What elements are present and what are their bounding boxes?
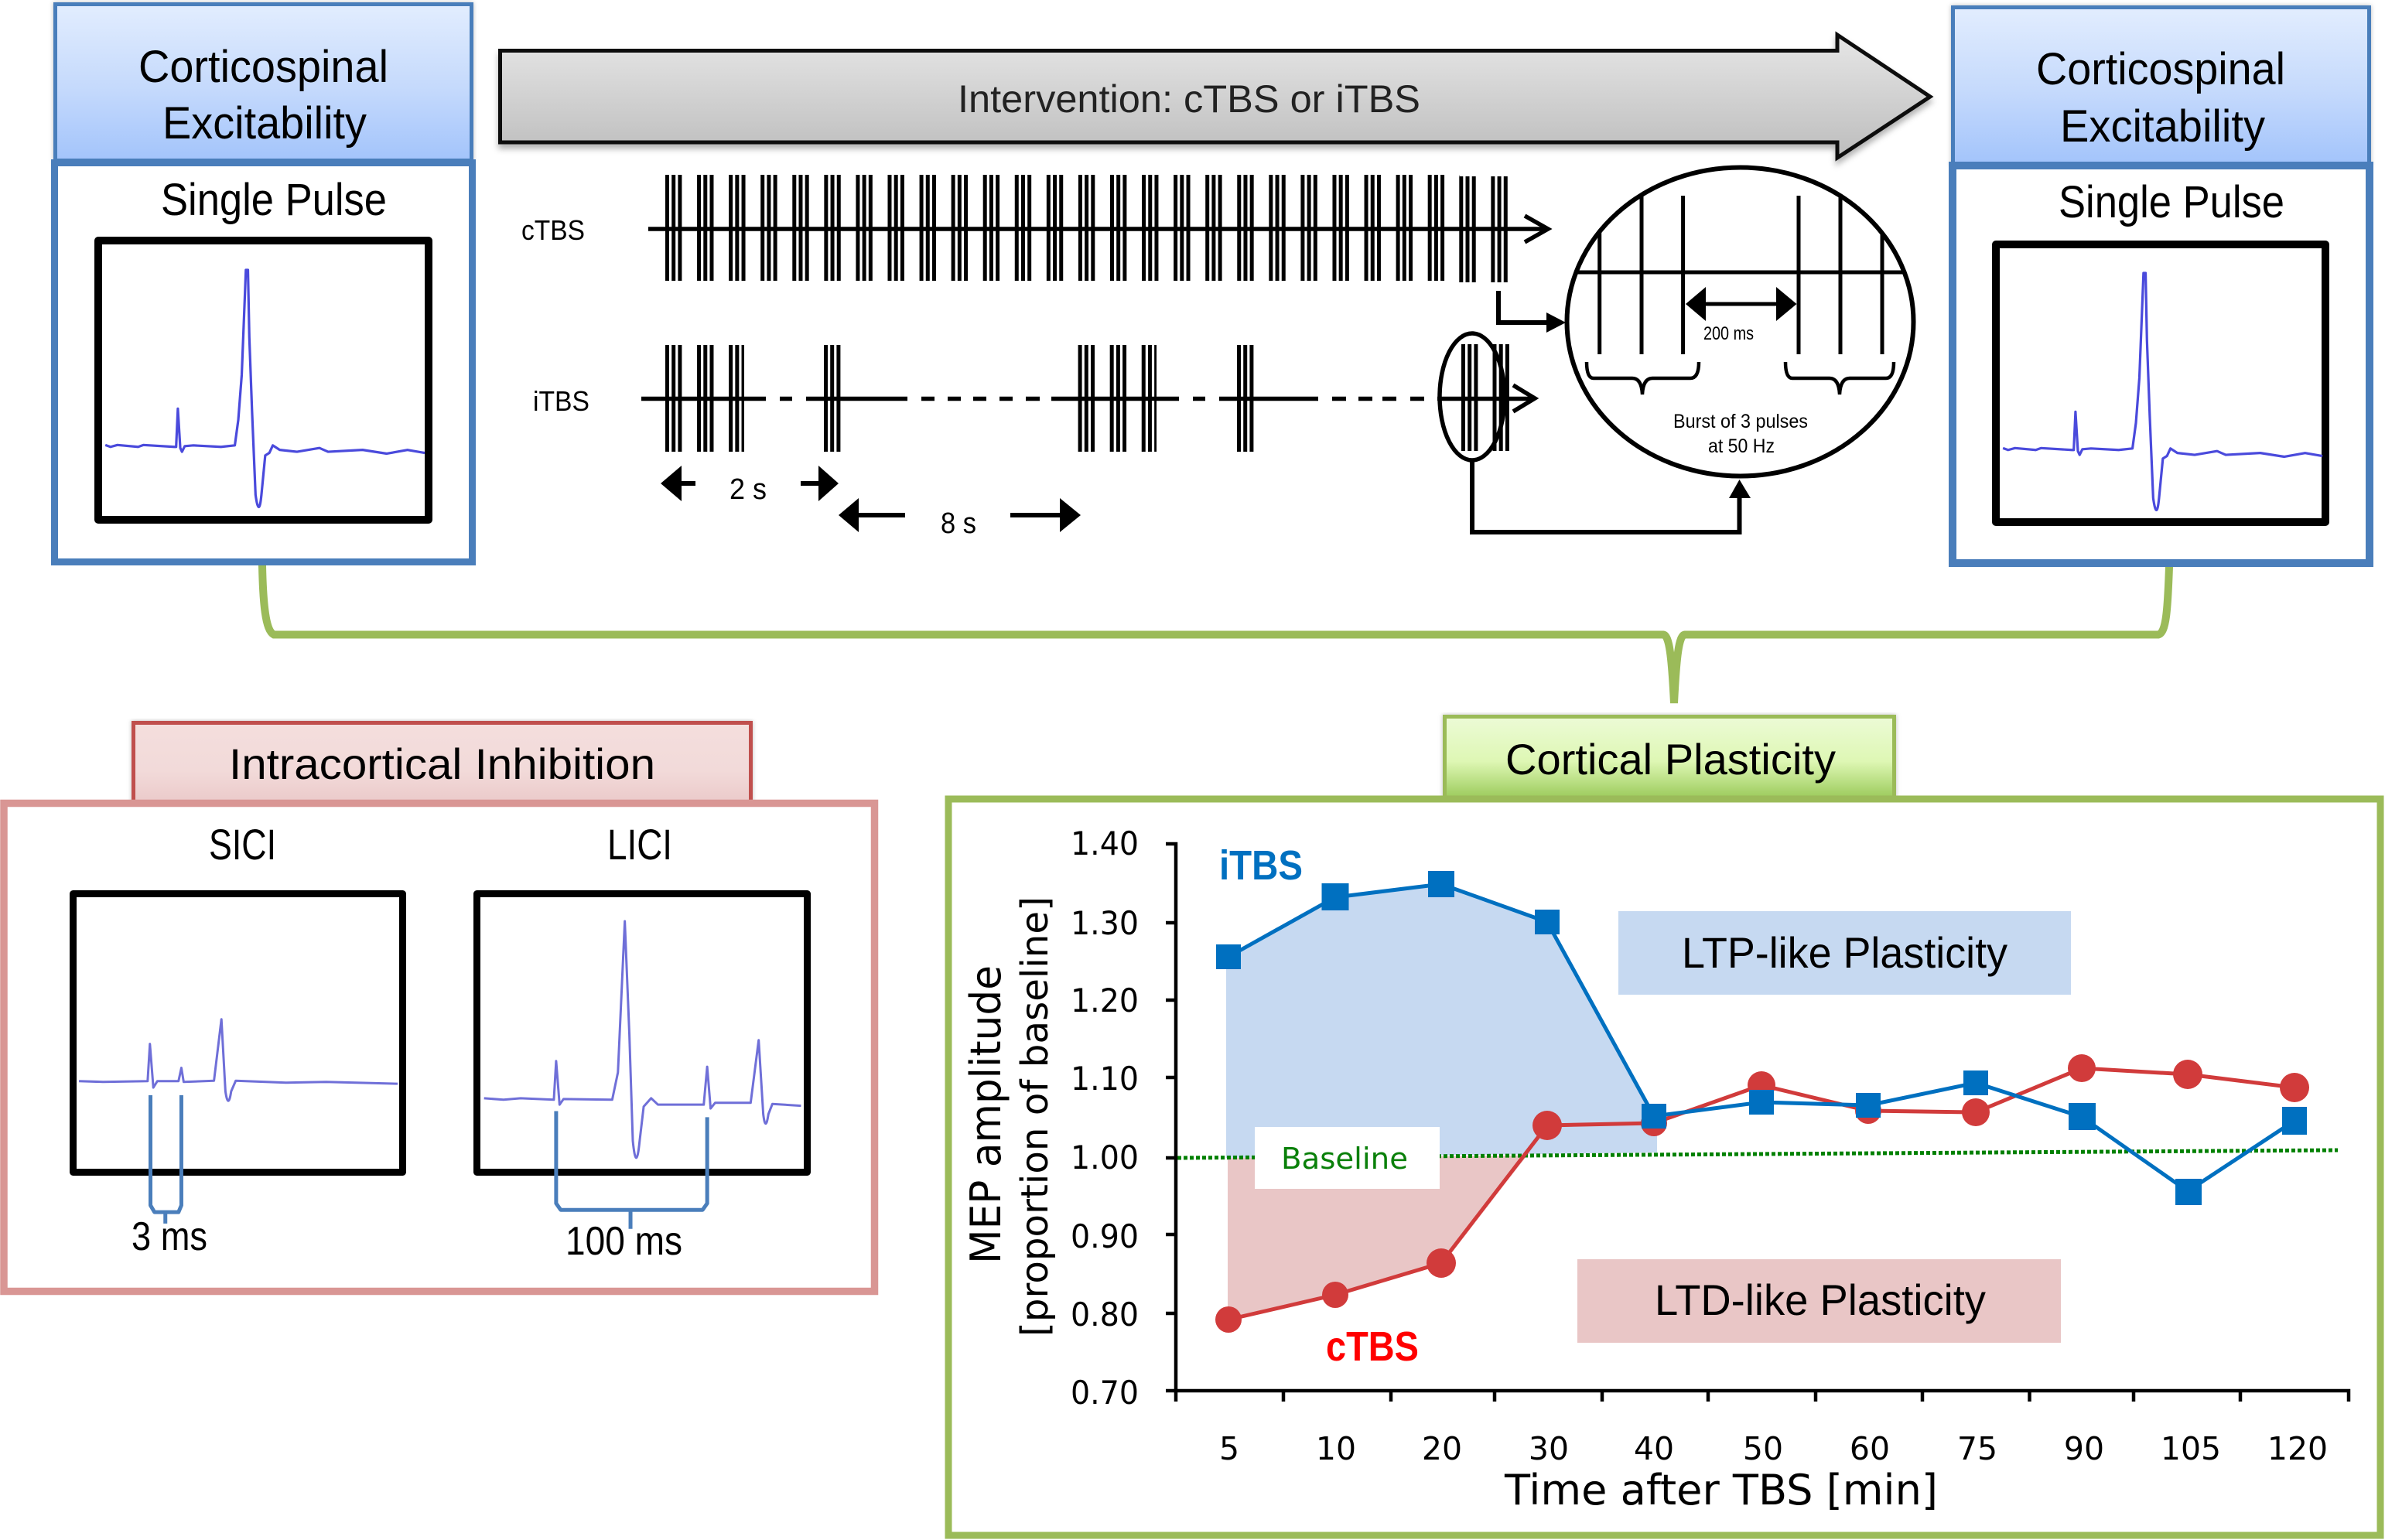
- baseline label: Baseline: [1281, 1142, 1408, 1176]
- y axis tick labels: 0.70: [1071, 1374, 1139, 1412]
- arrow: 8 s span: 8 s: [941, 507, 976, 540]
- single pulse box: [1953, 166, 2370, 563]
- detail circle: burst structure: [1567, 167, 1914, 476]
- arrow: intervention cTBS or iTBS: Intervention: cTBS or iTBS: [958, 77, 1420, 121]
- detail circle: burst structure: at 50 Hz: [1708, 435, 1775, 457]
- callout: LTD-like plasticity: [1577, 1259, 2061, 1343]
- shaded area: LTD-like: [1228, 1156, 1527, 1320]
- x axis tick labels: 60: [1850, 1430, 1890, 1467]
- double arrow: 200 ms: [1686, 287, 1796, 321]
- header: corticospinal excitability: Excitability: [2060, 101, 2265, 152]
- brace left: [1587, 362, 1699, 394]
- LICI: LICI: [607, 820, 672, 869]
- panel: corticospinal excitability after: [1953, 8, 2370, 563]
- label: iTBS: iTBS: [533, 385, 589, 417]
- label: cTBS: cTBS: [521, 214, 585, 246]
- chart box: [948, 799, 2380, 1535]
- green bracket connecting excitability panels to cortical plasticity: [262, 565, 2169, 703]
- pulses: [1576, 196, 1903, 354]
- y axis title: [proportion of baseline]: [1013, 896, 1057, 1337]
- arrow: 2 s span: [661, 466, 839, 506]
- x axis tick labels: [1219, 1430, 2328, 1467]
- x axis tick labels: 30: [1529, 1430, 1569, 1467]
- SICI: [73, 820, 402, 1259]
- axes: [1166, 844, 2349, 1402]
- box: [4, 803, 874, 1292]
- y axis title: [962, 896, 1057, 1337]
- baseline label: [1255, 1127, 1440, 1189]
- x axis tick labels: 75: [1957, 1430, 1997, 1467]
- iTBS pulse train: [641, 385, 1535, 411]
- y axis tick labels: 0.80: [1071, 1296, 1139, 1333]
- x axis tick labels: 20: [1422, 1430, 1462, 1467]
- LICI: 100 ms: [565, 1219, 682, 1264]
- x axis tick labels: 90: [2064, 1430, 2104, 1467]
- header: cortical plasticity: Cortical Plasticity: [1505, 735, 1836, 784]
- y axis tick labels: 1.00: [1071, 1139, 1139, 1176]
- x axis tick labels: 120: [2267, 1430, 2328, 1467]
- LICI: [477, 820, 808, 1264]
- callout: LTP-like plasticity: [1618, 911, 2071, 995]
- x axis title: Time after TBS [min]: [1504, 1466, 1938, 1514]
- header: corticospinal excitability: Corticospinal: [138, 42, 388, 92]
- callout: LTD-like plasticity: LTD-like Plasticity: [1655, 1275, 1986, 1324]
- SICI: SICI: [209, 820, 276, 869]
- panel: cortical plasticity: [948, 716, 2380, 1535]
- header: cortical plasticity: [1445, 716, 1894, 798]
- arrow: iTBS ellipse to detail circle: [1472, 461, 1751, 532]
- brace right: [1785, 362, 1894, 394]
- y axis tick labels: [1071, 825, 1139, 1412]
- ellipse highlighting iTBS burst: [1440, 333, 1505, 460]
- x axis tick labels: 40: [1634, 1430, 1674, 1467]
- header: corticospinal excitability: [1953, 8, 2369, 164]
- header: corticospinal excitability: [56, 5, 472, 161]
- panel: corticospinal excitability before: [54, 5, 472, 562]
- x axis tick labels: 105: [2161, 1430, 2221, 1467]
- SICI: 3 ms: [132, 1214, 207, 1259]
- single pulse box: Single Pulse: [2059, 177, 2284, 227]
- single pulse box: Single Pulse: [161, 175, 387, 225]
- y axis tick labels: 1.20: [1071, 982, 1139, 1019]
- single pulse box: [54, 162, 472, 562]
- baseline dotted line: [1177, 1150, 2338, 1158]
- y axis tick labels: 1.10: [1071, 1060, 1139, 1098]
- detail circle: burst structure: Burst of 3 pulses: [1673, 411, 1808, 432]
- panel: intracortical inhibition: [4, 722, 874, 1292]
- x axis tick labels: 5: [1219, 1430, 1239, 1467]
- y axis tick labels: 1.40: [1071, 825, 1139, 862]
- arrow: 2 s span: 2 s: [730, 473, 767, 506]
- header: corticospinal excitability: Corticospinal: [2036, 44, 2285, 94]
- shaded area: LTP-like: [1226, 884, 1657, 1158]
- x axis tick labels: 10: [1316, 1430, 1356, 1467]
- arrow: 8 s span: [839, 498, 1081, 540]
- series: iTBS: [1216, 871, 2307, 1205]
- series label: iTBS: iTBS: [1219, 842, 1303, 889]
- SICI trace and bracket: [79, 1019, 398, 1224]
- header: corticospinal excitability: Excitability: [162, 98, 367, 149]
- callout: LTP-like plasticity: LTP-like Plasticity: [1682, 928, 2007, 977]
- y axis tick labels: 1.30: [1071, 904, 1139, 942]
- cTBS pulse train: [648, 216, 1548, 242]
- MEP trace: [105, 270, 425, 507]
- header: intracortical inhibition: Intracortical Inhibition: [229, 739, 655, 788]
- series: cTBS: [1215, 1054, 2309, 1333]
- series label: cTBS: cTBS: [1326, 1323, 1419, 1370]
- arrow: cTBS to detail circle: [1498, 291, 1566, 333]
- header: intracortical inhibition: [133, 722, 750, 803]
- arrow: intervention cTBS or iTBS: [500, 35, 1930, 158]
- y axis tick labels: 0.90: [1071, 1217, 1139, 1255]
- y axis title: MEP amplitude: [962, 965, 1010, 1264]
- MEP trace: [2003, 273, 2322, 510]
- detail circle: burst structure: 200 ms: [1703, 323, 1754, 344]
- x axis tick labels: 50: [1743, 1430, 1783, 1467]
- LICI trace and bracket: [484, 921, 801, 1229]
